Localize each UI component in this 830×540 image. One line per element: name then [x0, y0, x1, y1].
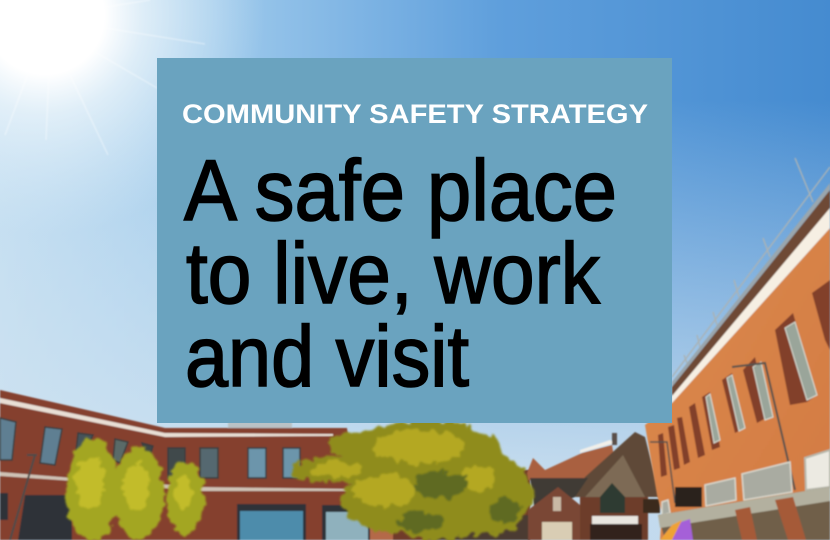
rooftop plant — [228, 422, 292, 428]
main title: and visit — [185, 309, 469, 405]
left brick building — [0, 390, 530, 540]
shopfronts — [0, 493, 393, 540]
trees — [66, 420, 532, 540]
main title — [184, 143, 617, 405]
street lamp — [732, 363, 795, 490]
shopfront frames — [658, 487, 830, 540]
upper windows — [0, 418, 300, 478]
eyebrow heading: COMMUNITY SAFETY STRATEGY — [182, 99, 648, 129]
right building — [645, 158, 830, 540]
shutters — [662, 462, 792, 515]
windows — [658, 280, 830, 477]
middle buildings — [527, 432, 660, 540]
main title: to live, work — [186, 226, 601, 322]
title panel — [157, 58, 672, 423]
main title: A safe place — [184, 143, 617, 239]
roof railing — [672, 158, 830, 377]
hanging sign — [675, 487, 702, 507]
rainbow lens flare — [660, 519, 693, 540]
